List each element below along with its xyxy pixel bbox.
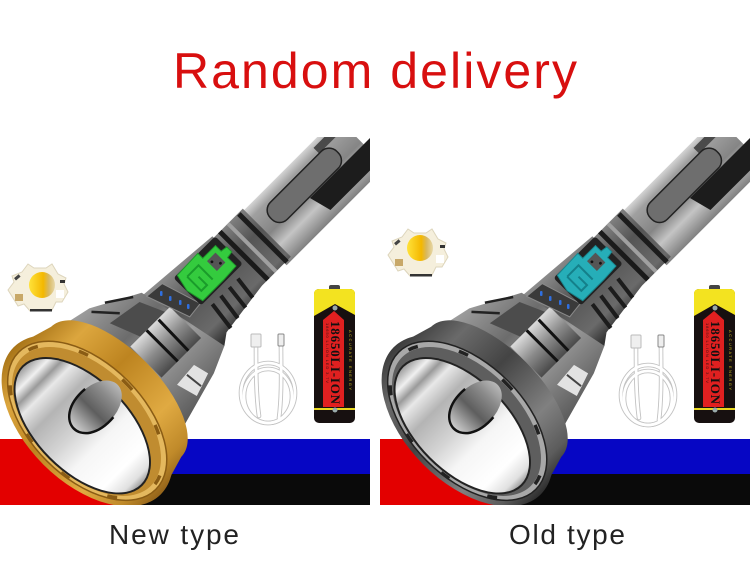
battery indicator lights (540, 291, 570, 309)
USB cable (241, 334, 295, 423)
battery: ACCURATE ENERGY (348, 330, 353, 390)
colour band background (0, 439, 370, 505)
battery (694, 285, 735, 423)
label: new type: New type (109, 519, 239, 550)
battery: 18650LI-ION (328, 321, 343, 405)
battery: 18650 LI-ION LED 3.7V (325, 323, 330, 383)
battery (314, 285, 355, 423)
USB cable (621, 335, 675, 425)
panel: old type (380, 137, 750, 505)
colour band background (380, 439, 750, 505)
title: Random delivery (173, 43, 577, 99)
power switch: green (174, 236, 242, 304)
battery indicator lights (160, 291, 190, 309)
battery: ACCURATE ENERGY (728, 330, 733, 390)
LED chip (8, 264, 68, 312)
battery: 18650LI-ION (708, 321, 723, 405)
power switch: teal (554, 236, 622, 304)
battery: 18650 LI-ION LED 3.7V (705, 323, 710, 383)
LED chip (388, 229, 448, 276)
flashlight with gold head (2, 137, 370, 505)
flashlight with dark head (382, 137, 750, 505)
panel: new type (0, 137, 370, 505)
label: old type: Old type (509, 519, 625, 550)
